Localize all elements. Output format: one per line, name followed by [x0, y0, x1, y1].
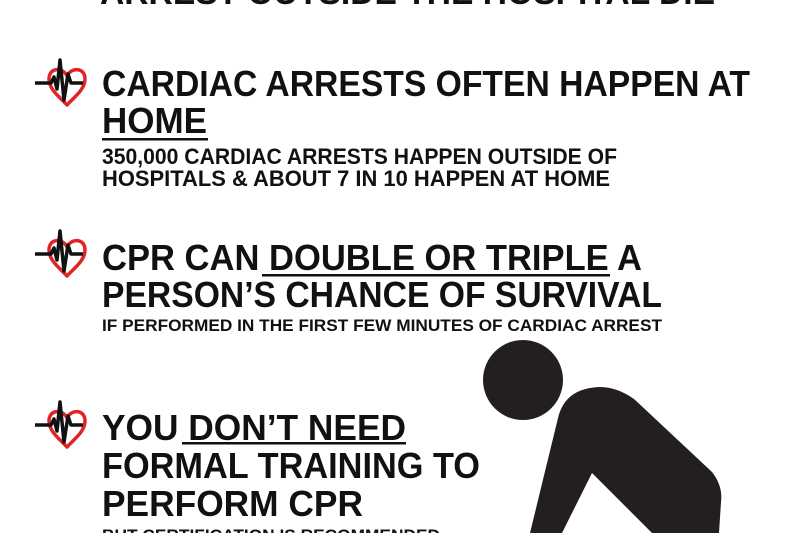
- icon: person performing CPR: [483, 340, 721, 533]
- text block 1: 350,000 CARDIAC ARRESTS HAPPEN OUTSIDE OF: [102, 144, 617, 169]
- heading 1: CARDIAC ARRESTS OFTEN HAPPEN AT: [102, 63, 750, 104]
- icon: heart 3: [35, 402, 85, 447]
- heading 3: PERFORM CPR: [102, 483, 363, 524]
- heading 1: [102, 63, 750, 141]
- icon: heart 1: [35, 60, 85, 105]
- icon: heart 2: [35, 231, 85, 276]
- text block 1: [102, 144, 617, 191]
- heading 1: HOME: [102, 100, 207, 141]
- text block 1: HOSPITALS & ABOUT 7 IN 10 HAPPEN AT HOME: [102, 166, 610, 191]
- text block 2: IF PERFORMED IN THE FIRST FEW MINUTES OF CARDIAC ARREST: [102, 316, 663, 335]
- heading 3: YOU DON’T NEED: [102, 407, 406, 448]
- heading 2: PERSON’S CHANCE OF SURVIVAL: [102, 274, 662, 315]
- heading 3: FORMAL TRAINING TO: [102, 445, 480, 486]
- heading 3: [102, 407, 480, 524]
- heading 2: [102, 237, 662, 315]
- heading 2: CPR CAN DOUBLE OR TRIPLE A: [102, 237, 642, 278]
